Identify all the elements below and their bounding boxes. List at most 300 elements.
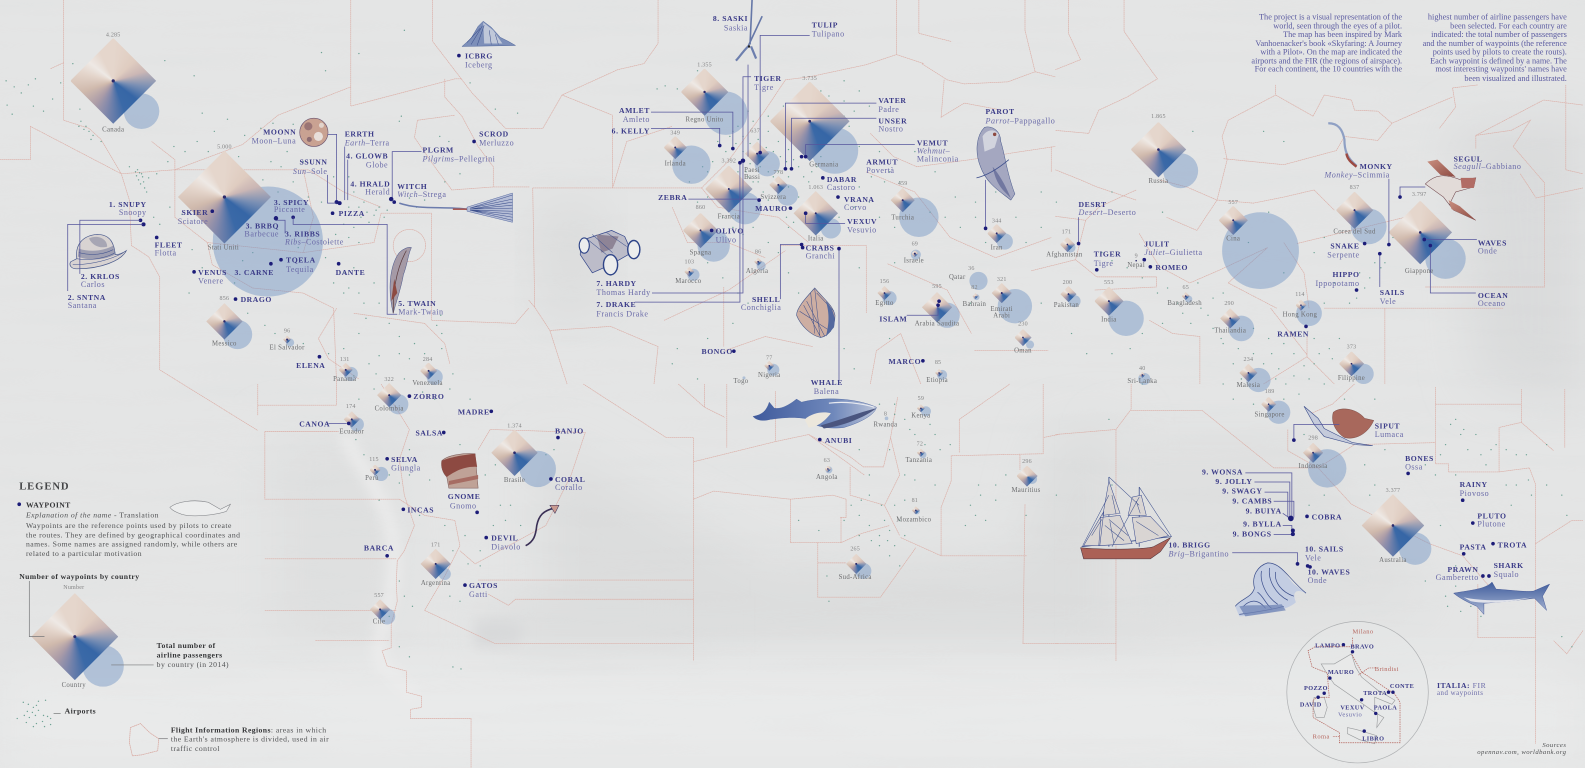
country: Colombia [375, 377, 408, 414]
country: Israele [904, 242, 924, 262]
waypoint: SASKI: 8. SASKI [713, 14, 748, 23]
country: Cile: Cile [373, 618, 385, 625]
country: Nigeria: Nigeria [758, 372, 780, 379]
country: Kenya [911, 396, 931, 419]
country: Pakistan: 200 [1063, 280, 1072, 286]
waypoint: SCROD: Merluzzo [479, 139, 514, 148]
inset: Italia FIR and waypoints: MAURO [1328, 669, 1354, 676]
waypoint: PLUTO [1471, 511, 1507, 528]
country: Messico: 856 [220, 296, 229, 302]
waypoint: AMLET: Amleto [623, 115, 650, 124]
waypoint: RIBBS: 3. RIBBS [285, 229, 320, 238]
waypoint: RAMEN: RAMEN [1277, 330, 1309, 339]
country: Kenya: Kenya [911, 412, 930, 419]
country: Bangladesh: 65 [1182, 285, 1189, 291]
waypoint: SALSA: SALSA [415, 429, 443, 438]
country: Israele: 69 [912, 242, 918, 248]
country: Russia [1131, 114, 1198, 188]
waypoint: OCEAN: Oceano [1478, 299, 1506, 308]
country: Venezuela [412, 357, 443, 387]
waypoint: DEVIL: DEVIL [491, 534, 518, 543]
legend diamond key: Number of waypoints by country [19, 572, 139, 581]
waypoint: RAMEN [1277, 325, 1309, 339]
waypoint: HARDY: 7. HARDY [596, 279, 637, 288]
country: Arabia Saudita: Arabia Saudita [915, 320, 959, 327]
waypoint: MARCO: MARCO [889, 357, 921, 366]
waypoint: VENUS [192, 268, 227, 285]
waypoint: SNAKE: SNAKE [1330, 242, 1360, 251]
country: Egitto: 156 [880, 279, 889, 285]
waypoint: HIPPO: Ippopotamo [1315, 279, 1360, 288]
waypoint: SHARK: Squalo [1494, 570, 1519, 579]
waypoint: SNTNA [68, 224, 143, 310]
waypoint: DEVIL [484, 534, 521, 552]
waypoint: PLGRM [392, 146, 496, 198]
waypoint: SKIER: SKIER [182, 208, 208, 217]
country: Emirati Arabi: Arabi [993, 312, 1010, 319]
country: Rwanda [873, 411, 897, 428]
inset: FIR boundaries [1308, 638, 1400, 743]
country: Etiopia [926, 360, 948, 384]
waypoint: CORAL [549, 475, 585, 492]
intro text: been visualized and illustrated. [1464, 74, 1567, 83]
waypoint: DABAR [821, 175, 857, 192]
country: Thailandia [1214, 301, 1254, 341]
country: Emirati Arabi [991, 277, 1032, 323]
waypoints: group 9: 9. BUIYA [1246, 506, 1282, 515]
country: Russia: Russia [1148, 178, 1168, 185]
waypoint: DRAKE [596, 161, 742, 318]
country: Panama [333, 357, 358, 383]
waypoint: JULIT [1142, 240, 1203, 262]
country: Brasile: Brasile [504, 477, 525, 484]
waypoint: TQELA [279, 256, 316, 274]
icon: wave [1235, 563, 1306, 616]
waypoint: SSUNN [293, 158, 337, 203]
waypoint: SHELL: SHELL [752, 295, 780, 304]
waypoint: WHALE: WHALE [811, 378, 843, 387]
waypoint: SHELL [741, 243, 803, 312]
country: Colombia: Colombia [375, 405, 404, 412]
country: Mozambico: Mozambico [896, 516, 932, 523]
country: Emirati Arabi: Emirati [991, 306, 1013, 313]
waypoint: SELVA [385, 455, 421, 472]
country: El Salvador [270, 328, 304, 350]
waypoints: group 9: 9. CAMBS [1232, 497, 1272, 506]
country: Bangladesh [1167, 285, 1202, 307]
inset: Italia FIR and waypoints: TROTA [1363, 690, 1387, 697]
country: Oman: Oman [1014, 348, 1032, 355]
legend waypoint description: names. Some names are assigned randomly, while others are [26, 540, 238, 549]
country: Kenya: 59 [918, 396, 924, 402]
country: Svizzera: 778 [774, 170, 783, 176]
waypoint: CANOA: CANOA [299, 419, 330, 428]
country: Malesia [1237, 357, 1271, 392]
country: Sri-Lanka: Sri-Lanka [1127, 378, 1157, 385]
country: Paesi Bassi [744, 128, 780, 181]
waypoint: GLOWB [346, 152, 388, 200]
country: Giappone: Giappone [1405, 268, 1434, 275]
waypoint: TIGER [741, 74, 782, 163]
country: Sri-Lanka: 40 [1139, 366, 1145, 372]
intro text: indicated: the total number of passengers [1431, 30, 1567, 39]
icon: parrot [976, 127, 1015, 200]
waypoint: SAILS [1378, 252, 1405, 306]
waypoint: SEGUL: Seagull–Gabbiano [1454, 162, 1521, 171]
waypoint: SCROD: SCROD [479, 129, 509, 138]
waypoint: TWAIN [293, 217, 444, 316]
country: Cina: Cina [1226, 236, 1240, 243]
country: Regno Unito [681, 63, 748, 135]
country: Turchia [891, 181, 939, 237]
legend diamond key: Total number of [157, 641, 216, 650]
waypoint: GLOWB: 4. GLOWB [346, 152, 388, 161]
waypoint: VENUS: Venere [198, 276, 224, 285]
country: Svizzera: Svizzera [760, 194, 786, 201]
waypoint: SNTNA: Santana [68, 301, 97, 310]
waypoint: CANOA [299, 419, 351, 428]
country: Qatar [949, 266, 988, 290]
waypoint: SAILS 10: 10. SAILS [1305, 545, 1344, 554]
icon: snail [1304, 406, 1374, 446]
country: Iran: Iran [991, 245, 1003, 252]
waypoints: group 9: 9. SWAGY [1222, 487, 1263, 496]
waypoint: BRIGG: 10. BRIGG [1169, 541, 1211, 550]
waypoint: SHARK [1487, 561, 1524, 579]
icon: shell [797, 288, 835, 338]
waypoint: WAVES 10 [1308, 565, 1350, 585]
waypoint: HRALD: Herald [365, 188, 390, 197]
intro text: and the number of waypoints (the reference [1423, 39, 1567, 48]
country: Oman [1014, 321, 1034, 355]
waypoint: SASKI: Saskia [724, 23, 748, 32]
inset: Italia FIR and waypoints: Vesuvio [1338, 711, 1362, 718]
country: Francia: Francia [718, 213, 740, 220]
country: Sud-Africa: Sud-Africa [839, 574, 872, 581]
waypoint: ELENA: ELENA [296, 361, 325, 370]
waypoint: BARCA [364, 544, 394, 558]
waypoint: SAILS 10 [1305, 545, 1344, 568]
waypoint: HARDY: Thomas Hardy [596, 288, 651, 297]
legend waypoint description: related to a particular motivation [26, 549, 142, 558]
waypoint: CORAL: Corallo [555, 483, 583, 492]
waypoint: ARMUT: Povertà [866, 166, 895, 175]
icon: shark [1454, 582, 1550, 614]
country: Turchia: 459 [898, 181, 908, 187]
waypoints: group 9: 9. BONGS [1233, 530, 1272, 539]
legend diamond key [19, 572, 229, 689]
country: Filippine [1338, 345, 1374, 384]
waypoint: ICBRG: ICBRG [465, 52, 493, 61]
waypoint: DEVIL: Diavolo [491, 543, 521, 552]
waypoint: VEMUT: Malinconia [917, 155, 959, 164]
country: Mozambico [896, 498, 932, 523]
country: Australia [1362, 488, 1431, 565]
waypoint: VATER [784, 96, 907, 171]
sources: Sources [1542, 742, 1566, 749]
waypoint: TIGER Asia: TIGER [1094, 250, 1121, 259]
country: Egitto [875, 279, 897, 307]
waypoint: ZORRO: ZORRO [413, 392, 444, 401]
country: Italia: Italia [808, 236, 824, 243]
country: Svizzera [760, 170, 798, 206]
country: El Salvador: El Salvador [270, 345, 305, 352]
waypoint: UNSER: Nostro [878, 124, 903, 133]
waypoint: SELVA: SELVA [391, 455, 418, 464]
waypoint: VRANA: Corvo [844, 203, 867, 212]
intro text: highest number of airline passengers have [1428, 13, 1567, 22]
country: Messico [206, 296, 252, 349]
waypoints: group 9: 9. JOLLY [1215, 477, 1252, 486]
waypoint: KRLOS: Carlos [81, 280, 105, 289]
waypoint: AMLET [619, 106, 735, 150]
inset: Italia FIR and waypoints: Brindisi [1375, 666, 1399, 673]
waypoint: ROMEO: ROMEO [1155, 263, 1188, 272]
waypoint: VEXUV [804, 211, 877, 234]
waypoint: CARNE: 3. CARNE [235, 268, 274, 277]
country: El Salvador: 96 [284, 328, 290, 334]
country: Russia: 1.865 [1151, 114, 1166, 120]
country: Angola: 63 [824, 458, 830, 464]
waypoint: SHARK: SHARK [1494, 561, 1524, 570]
waypoint: SSUNN: SSUNN [300, 158, 328, 167]
waypoint: ERRTH: Earth–Terra [344, 139, 390, 148]
waypoint: TROTA: TROTA [1498, 541, 1527, 550]
country: Spagna [683, 205, 730, 262]
legend whale sketch [170, 501, 230, 516]
waypoint: SNAKE: Serpente [1327, 251, 1360, 260]
waypoint: TQELA: Tequila [286, 265, 314, 274]
icon: iceberg [462, 21, 516, 46]
country: Bangladesh: Bangladesh [1167, 300, 1202, 307]
country: Emirati Arabi: 321 [997, 277, 1007, 283]
waypoint: WHALE: Balena [814, 387, 839, 396]
country: Germania: Germania [809, 162, 838, 169]
icon: scissors [736, 0, 762, 61]
waypoint: PRAWN [1436, 565, 1485, 582]
waypoint: FLEET: FLEET [155, 241, 183, 250]
country: Ecuador: 174 [346, 404, 356, 410]
country: Algeria: Algeria [746, 268, 768, 275]
country: Etiopia: 85 [935, 360, 941, 366]
country: Irlanda: Irlanda [665, 161, 686, 168]
waypoint: SPICY: 3. SPICY [274, 198, 309, 207]
inset: Italia FIR and waypoints: DAVID [1300, 701, 1322, 708]
waypoint: DANTE: DANTE [336, 268, 365, 277]
waypoint: PRAWN: Gamberetto [1436, 573, 1479, 582]
intro text: points used by pilots to create the routs). [1433, 48, 1567, 57]
waypoint: VENUS: VENUS [198, 268, 227, 277]
waypoint: VATER: Padre [878, 105, 899, 114]
country: Stati Uniti [178, 145, 323, 297]
icon: witch broom [399, 193, 512, 222]
waypoint: AMLET: AMLET [619, 106, 650, 115]
country: Rwanda: Rwanda [873, 421, 897, 428]
waypoint: CRABS [801, 244, 835, 261]
icon: feather [390, 247, 411, 313]
country: Marocco: 103 [685, 260, 694, 266]
waypoint: ISLAM [879, 299, 941, 323]
waypoint: SAILS: SAILS [1380, 288, 1405, 297]
waypoint: SNUPY: Snoopy [119, 208, 147, 217]
legend [17, 482, 329, 756]
country: Germania [770, 76, 858, 174]
icon: moon [300, 118, 328, 147]
country: Bahrain: 82 [971, 285, 978, 291]
waypoint: BANJO [555, 427, 584, 439]
waypoint: CARNE [235, 262, 274, 277]
country: Nepal [1127, 254, 1145, 269]
waypoint: SEGUL [1398, 155, 1521, 199]
country: Nigeria: 77 [766, 356, 772, 362]
waypoint: WHALE [811, 247, 843, 396]
country: Malesia: Malesia [1237, 382, 1260, 389]
waypoint: CRABS: CRABS [806, 244, 834, 253]
waypoint: SIPUT: SIPUT [1375, 421, 1400, 430]
country: Irlanda [664, 130, 711, 184]
country: Oman: 230 [1018, 321, 1028, 327]
country: Perù: 115 [369, 457, 379, 463]
waypoints: group 9: 9. WONSA [1202, 467, 1243, 476]
waypoint: HIPPO: HIPPO [1332, 270, 1360, 279]
waypoint: KELLY: 6. KELLY [612, 126, 650, 135]
waypoint: VEMUT [804, 139, 959, 164]
icon: binoculars [579, 230, 640, 275]
waypoint: OLIVO: OLIVO [716, 226, 744, 235]
waypoint: BARCA: BARCA [364, 544, 394, 553]
legend waypoint description: the routes. They are defined by geographical coordinates and [26, 530, 240, 539]
legend waypoint key: WAYPOINT [26, 500, 71, 509]
waypoint: KRLOS: 2. KRLOS [81, 272, 120, 281]
country: Panama: 131 [340, 357, 350, 363]
waypoint: SELVA: Giungla [391, 463, 421, 472]
country: Francia: 3.392 [722, 159, 736, 165]
country: Italia [794, 185, 841, 243]
country: Pakistan: Pakistan [1054, 302, 1079, 309]
country: Iran: 344 [992, 218, 1002, 224]
intro text: For each continent, the 10 countries with the [1255, 65, 1402, 74]
waypoint: JULIT: Juliet–Giulietta [1144, 248, 1203, 257]
country: Argentina: Argentina [421, 580, 451, 587]
country: Marocco [676, 260, 701, 283]
waypoint: SASKI [713, 14, 748, 157]
waypoint: GATOS: Gatti [469, 590, 488, 599]
waypoint: OLIVO: Ulivo [716, 236, 737, 245]
country: Thailandia: 290 [1224, 301, 1234, 307]
waypoint: VATER: VATER [878, 96, 907, 105]
waypoint: PAROT: Parrot–Pappagallo [985, 116, 1055, 125]
waypoint: TIGER: Tigre [754, 83, 774, 92]
country: Hong Kong [1283, 292, 1322, 326]
country: Perù: Perù [365, 475, 379, 482]
waypoint: KRLOS [80, 220, 146, 289]
legend waypoint key [17, 500, 159, 519]
waypoint: MONKY: MONKY [1360, 162, 1393, 171]
country: Perù [365, 457, 388, 482]
intro text: Vanhoenacker's book «Skyfaring: A Journey [1255, 39, 1403, 48]
waypoint: BONES: BONES [1405, 454, 1434, 463]
waypoint: OCEAN: OCEAN [1478, 291, 1508, 300]
country: Spagna: Spagna [690, 250, 711, 257]
waypoint: PAROT [984, 107, 1055, 230]
legend waypoint description [26, 521, 240, 558]
waypoint: PASTA: PASTA [1460, 543, 1486, 552]
country: Angola: Angola [816, 474, 838, 481]
legend airports key [17, 700, 96, 727]
waypoint: SSUNN: Sun–Sole [293, 167, 328, 176]
country: Pakistan [1054, 280, 1081, 309]
country: Canada: Canada [102, 126, 124, 133]
waypoint: JULIT: JULIT [1144, 240, 1170, 249]
waypoint: WITCH: WITCH [397, 182, 427, 191]
waypoint: OLIVO [710, 226, 744, 245]
waypoint: BRBQ [244, 216, 285, 238]
waypoint: DABAR: DABAR [827, 175, 857, 184]
waypoint: PLUTO: Plutone [1477, 519, 1506, 528]
country: Indonesia [1299, 436, 1346, 488]
waypoint: VEMUT: VEMUT [917, 139, 948, 148]
waypoint: RIBBS [284, 229, 344, 247]
inset: Italia FIR and waypoints: VEXUV [1340, 704, 1365, 711]
country: Tanzania: 72 [917, 442, 923, 448]
country: Hong Kong: Hong Kong [1283, 311, 1317, 318]
waypoint: GATOS: GATOS [469, 581, 498, 590]
country: Etiopia: Etiopia [926, 377, 948, 384]
waypoint: COBRA: COBRA [1312, 512, 1342, 521]
country: Sud-Africa: 265 [850, 547, 860, 553]
waypoint: MONKY: Monkey–Scimmia [1323, 170, 1390, 179]
waypoint: DRAGO: DRAGO [241, 295, 272, 304]
inset: Italy coast [1313, 654, 1395, 744]
inset: Italia FIR and waypoints: BRAVO [1350, 644, 1374, 651]
country: Messico: Messico [212, 341, 237, 348]
legend FIR key: Flight Information Regions: areas in which [171, 726, 327, 735]
country: Nepal: Nepal [1127, 262, 1145, 269]
country: Singapore [1255, 389, 1290, 424]
waypoint: TWAIN: Mark-Twain [398, 307, 444, 316]
country: Panama: Panama [333, 376, 356, 383]
country: Tanzania [905, 442, 932, 464]
waypoint: GATOS [463, 581, 498, 599]
waypoint: WAVES 10: 10. WAVES [1308, 567, 1350, 576]
waypoint: SAILS 10: Vele [1305, 553, 1321, 562]
country: India: 553 [1104, 280, 1114, 286]
waypoint: WITCH: Witch–Strega [397, 190, 446, 199]
waypoint: BONES [1405, 454, 1434, 475]
waypoint: RIBBS: Ribs–Costolette [284, 238, 344, 247]
waypoint: HRALD [350, 179, 393, 201]
country: Rwanda: 8 [884, 411, 887, 417]
icon: gnome hat [441, 453, 478, 488]
country: Stati Uniti: 5.000 [217, 145, 232, 151]
legend waypoint key: Explanation of the name - Translation [25, 510, 159, 519]
waypoint: WAVES [1422, 238, 1507, 256]
intro text: The map has been inspired by Mark [1283, 30, 1403, 39]
intro text: The project is a visual representation of the [1259, 13, 1402, 22]
inset: Italia FIR and waypoints: Milano [1353, 629, 1374, 636]
country: Argentina: 171 [431, 543, 441, 549]
waypoint: PRAWN: PRAWN [1448, 565, 1478, 574]
legend FIR key [129, 724, 329, 756]
waypoint: TULIP: TULIP [812, 20, 838, 29]
waypoint: BRIGG [1169, 541, 1299, 566]
waypoint: DANTE [336, 262, 365, 277]
country: Singapore: 189 [1265, 389, 1274, 395]
country: Egitto: Egitto [875, 300, 894, 307]
waypoint: GNOME: GNOME [448, 492, 480, 501]
intro text [1251, 13, 1567, 83]
country: Angola [816, 458, 838, 481]
